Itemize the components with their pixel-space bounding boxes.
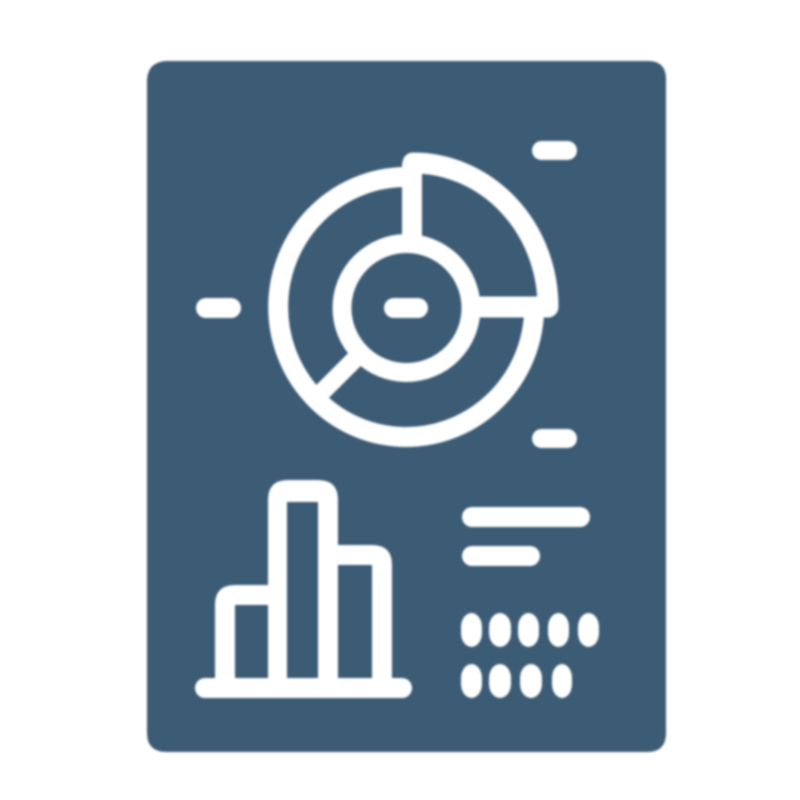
center label dash	[384, 298, 428, 318]
label dash top right	[532, 141, 577, 160]
label dash bottom right	[532, 429, 577, 448]
divider lower left	[318, 358, 356, 396]
highlighted slice	[413, 163, 548, 307]
donut chart	[278, 163, 548, 437]
baseline	[195, 678, 412, 698]
divider top	[402, 163, 422, 240]
inner ring	[342, 244, 471, 372]
bar 2 interior	[287, 502, 318, 680]
bar 1 interior	[235, 605, 268, 680]
panel: document background	[147, 61, 666, 752]
text line long	[462, 507, 590, 527]
bar 3 interior	[338, 565, 372, 680]
bar chart	[195, 480, 412, 698]
dot grid	[461, 613, 599, 698]
text line short	[462, 546, 540, 566]
label dash left	[196, 298, 241, 318]
bars outline	[215, 480, 392, 688]
outer ring lower left	[278, 177, 534, 437]
